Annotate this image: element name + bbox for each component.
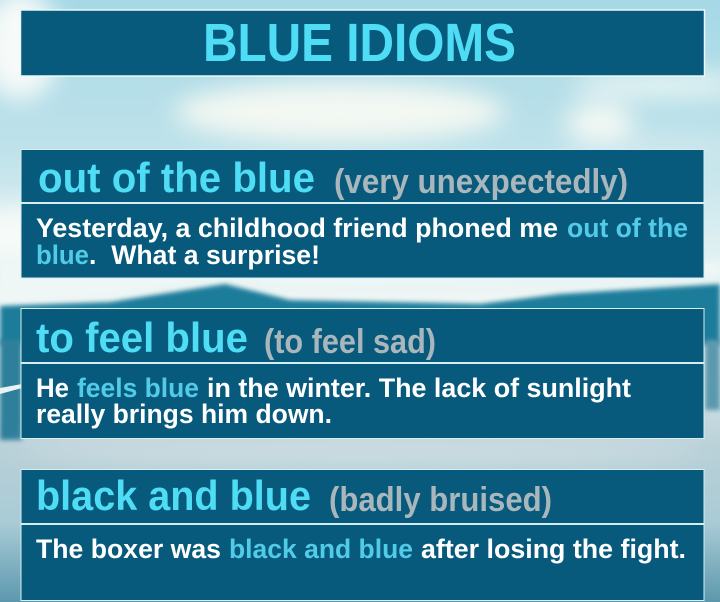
example sentence: Yesterday, a childhood friend phoned me xyxy=(36,213,558,243)
example sentence: blue xyxy=(36,240,89,270)
definition: (to feel sad) xyxy=(264,323,436,361)
panel: out of the blue xyxy=(21,150,704,278)
example sentence: feels blue xyxy=(77,373,199,403)
example sentence: black and blue xyxy=(229,534,413,564)
example sentence xyxy=(36,213,688,270)
example sentence: after losing the fight. xyxy=(421,534,686,564)
example sentence: . What a surprise! xyxy=(89,240,320,270)
example sentence xyxy=(36,534,686,564)
example sentence: out of the xyxy=(567,213,688,243)
title banner xyxy=(20,10,704,76)
panel: to feel blue xyxy=(21,308,704,438)
panel: black and blue xyxy=(21,470,704,600)
example sentence: The boxer was xyxy=(36,534,221,564)
example sentence: really brings him down. xyxy=(36,399,332,429)
title text: BLUE IDIOMS xyxy=(203,13,516,73)
example sentence xyxy=(36,373,631,429)
example sentence: He xyxy=(36,373,69,403)
idiom heading: out of the blue xyxy=(38,154,315,201)
idiom heading: to feel blue xyxy=(36,314,248,361)
definition: (badly bruised) xyxy=(329,481,552,519)
definition: (very unexpectedly) xyxy=(334,163,628,201)
example sentence: in the winter. The lack of sunlight xyxy=(207,373,631,403)
idiom heading: black and blue xyxy=(36,472,311,519)
